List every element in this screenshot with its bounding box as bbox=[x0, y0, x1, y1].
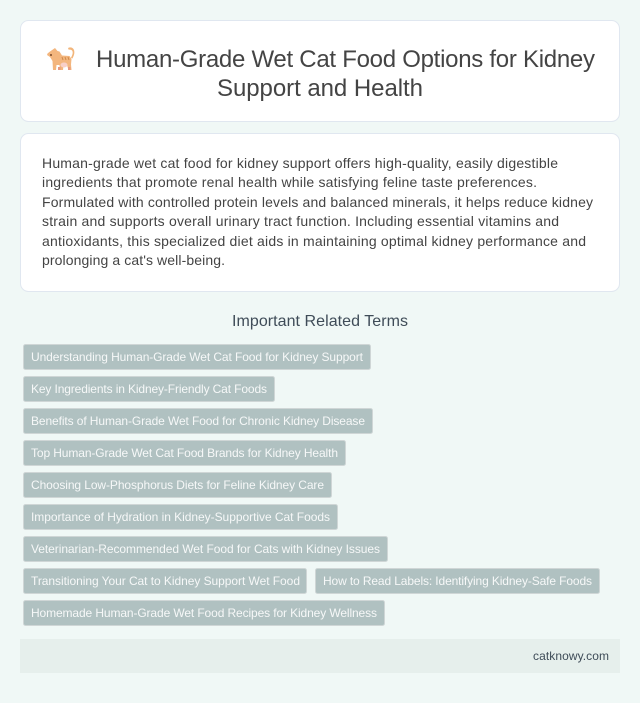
panel: description bbox=[20, 134, 620, 292]
tag 5: Choosing Low-Phosphorus Diets for Feline Kidney Care bbox=[31, 478, 324, 492]
footer bbox=[20, 639, 620, 673]
tag 7 bbox=[24, 536, 388, 562]
title text: Support and Health bbox=[217, 75, 423, 102]
panel: description: Human-grade wet cat food for kidney support offers high-quality, easily digestible bbox=[42, 155, 558, 171]
title panel bbox=[20, 20, 620, 122]
tag 3: Benefits of Human-Grade Wet Food for Chronic Kidney Disease bbox=[31, 414, 365, 428]
tag 4 bbox=[24, 440, 346, 466]
icon: orange cat bbox=[47, 47, 74, 70]
tag 3 bbox=[24, 408, 372, 434]
panel: description: strain and supports overall urinary tract function. Including essential vitamins and bbox=[42, 213, 559, 229]
footer: catknowy.com bbox=[533, 649, 609, 663]
tag 10: Homemade Human-Grade Wet Food Recipes for Kidney Wellness bbox=[31, 606, 377, 620]
heading: important related terms: Important Related Terms bbox=[232, 313, 408, 330]
title text bbox=[96, 46, 595, 102]
tag 7: Veterinarian-Recommended Wet Food for Cats with Kidney Issues bbox=[31, 542, 380, 556]
tag 9 bbox=[316, 568, 600, 594]
tag 6 bbox=[24, 504, 338, 530]
tag 1: Understanding Human-Grade Wet Cat Food for Kidney Support bbox=[31, 350, 364, 364]
title text: Human-Grade Wet Cat Food Options for Kidney bbox=[96, 46, 595, 73]
tag 1 bbox=[24, 344, 370, 370]
panel: description: Formulated with controlled protein levels and balanced minerals, it helps reduce kidney bbox=[42, 194, 593, 210]
tag 5 bbox=[24, 472, 332, 498]
tag 2: Key Ingredients in Kidney-Friendly Cat Foods bbox=[31, 382, 267, 396]
related terms tags bbox=[24, 344, 600, 626]
tag 9: How to Read Labels: Identifying Kidney-Safe Foods bbox=[323, 574, 592, 588]
tag 4: Top Human-Grade Wet Cat Food Brands for Kidney Health bbox=[31, 446, 338, 460]
tag 2 bbox=[24, 376, 274, 402]
panel: description: prolonging a cat's well-being. bbox=[42, 252, 225, 268]
tag 6: Importance of Hydration in Kidney-Supportive Cat Foods bbox=[31, 510, 330, 524]
tag 8: Transitioning Your Cat to Kidney Support Wet Food bbox=[31, 574, 300, 588]
tag 10 bbox=[24, 600, 384, 626]
panel: description: ingredients that promote renal health while satisfying feline taste preferences. bbox=[42, 174, 537, 190]
panel: description: antioxidants, this specialized diet aids in maintaining optimal kidney performance and bbox=[42, 233, 586, 249]
tag 8 bbox=[24, 568, 306, 594]
